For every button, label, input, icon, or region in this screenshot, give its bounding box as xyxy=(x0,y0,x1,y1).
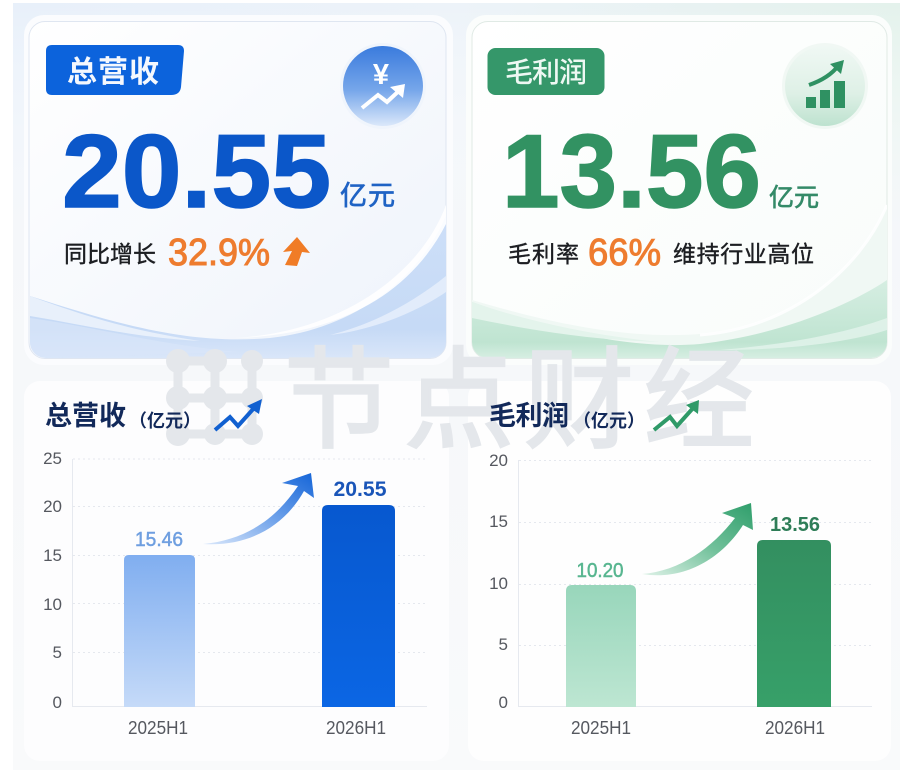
chart title: 总营收 xyxy=(45,401,126,431)
margin value: 66% xyxy=(588,232,661,274)
watermark xyxy=(166,340,754,463)
badge: total revenue: 总营收 xyxy=(67,56,159,89)
gridlines xyxy=(73,459,427,652)
icon: bars with arrow xyxy=(782,43,868,129)
unit: 亿元 xyxy=(769,184,819,212)
y axis labels: 10 xyxy=(43,595,62,614)
bar 2026H1 xyxy=(322,505,395,707)
value 13.56: 13.56 xyxy=(770,514,820,536)
growth label: 同比增长 xyxy=(64,241,156,267)
growth value: 32.9% xyxy=(168,232,270,274)
icon: trend arrow xyxy=(654,400,699,430)
growth arrow xyxy=(642,503,753,575)
icon: up arrow xyxy=(283,237,310,266)
bar 2026H1 xyxy=(757,540,831,707)
badge: gross profit: 毛利润 xyxy=(505,57,587,88)
y axis labels xyxy=(43,449,62,712)
card wave decoration xyxy=(472,205,887,358)
chart unit: （亿元） xyxy=(573,411,645,431)
chart: revenue xyxy=(43,399,427,738)
y axis labels: 20 xyxy=(489,451,508,470)
value: 13.56: 13.56 xyxy=(502,114,761,230)
margin note: 维持行业高位 xyxy=(673,241,814,267)
value 20.55: 20.55 xyxy=(334,478,387,501)
chart: profit: 2026H1 xyxy=(765,718,825,738)
panel: gross profit card xyxy=(466,15,892,365)
y axis labels: 5 xyxy=(499,635,508,654)
card wave decoration xyxy=(30,205,446,358)
panel: revenue chart card xyxy=(24,381,449,761)
y axis labels: 15 xyxy=(43,546,62,565)
y axis labels: 25 xyxy=(43,449,62,468)
y axis labels: 5 xyxy=(53,643,62,662)
x axis labels: 2025H1 xyxy=(571,718,631,738)
unit: 亿元 xyxy=(340,181,395,211)
y axis labels: 10 xyxy=(489,574,508,593)
y axis labels: 0 xyxy=(53,693,62,712)
y axis labels: 20 xyxy=(43,497,62,516)
gridlines xyxy=(519,460,872,646)
margin label: 毛利率 xyxy=(508,241,579,267)
y axis labels xyxy=(489,451,508,712)
chart title: 毛利润 xyxy=(489,401,569,431)
bar 2025H1 xyxy=(566,585,636,707)
watermark text: 节点财经 xyxy=(284,340,754,463)
panel: total revenue card xyxy=(24,15,453,365)
badge: total revenue xyxy=(46,45,184,95)
panel: profit chart card xyxy=(468,381,891,761)
value 15.46: 15.46 xyxy=(135,529,183,551)
y axis labels: 15 xyxy=(489,512,508,531)
icon: yen with rising trend: ¥ xyxy=(373,59,389,91)
icon: yen with rising trend xyxy=(340,43,426,129)
icon: trend arrow xyxy=(215,399,262,430)
growth arrow xyxy=(203,473,314,544)
value 10.20: 10.20 xyxy=(576,560,624,582)
x axis labels: 2025H1 xyxy=(128,718,188,738)
value: 20.55: 20.55 xyxy=(62,114,331,230)
chart: revenue: 2026H1 xyxy=(326,718,386,738)
watermark logo xyxy=(166,349,263,446)
bar 2025H1 xyxy=(124,555,195,707)
y axis labels: 0 xyxy=(499,693,508,712)
badge: gross profit xyxy=(488,48,604,95)
chart unit: （亿元） xyxy=(129,411,201,431)
chart: profit xyxy=(489,400,872,738)
